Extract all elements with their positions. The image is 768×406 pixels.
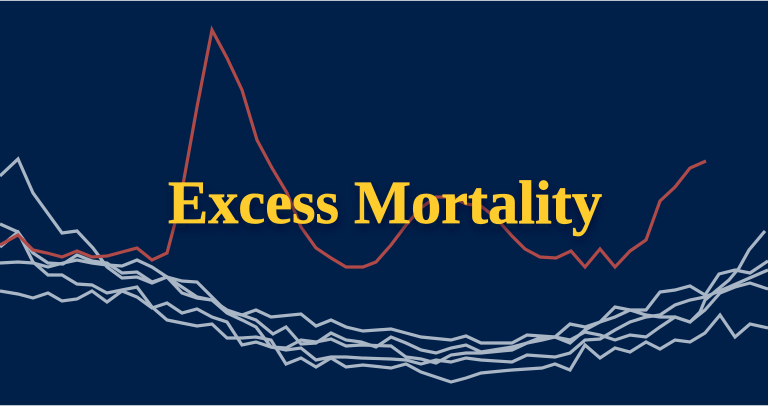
title: Excess Mortality: [168, 170, 602, 237]
red highlighted line: [0, 30, 706, 267]
grey line B: [0, 224, 768, 382]
grey line D: [0, 260, 768, 353]
title shadow: Excess Mortality: [170, 175, 602, 242]
grey line E: [0, 231, 765, 363]
grey line C: [0, 232, 768, 364]
grey line A: [0, 159, 768, 343]
comparison lines: grey group: [0, 159, 768, 382]
